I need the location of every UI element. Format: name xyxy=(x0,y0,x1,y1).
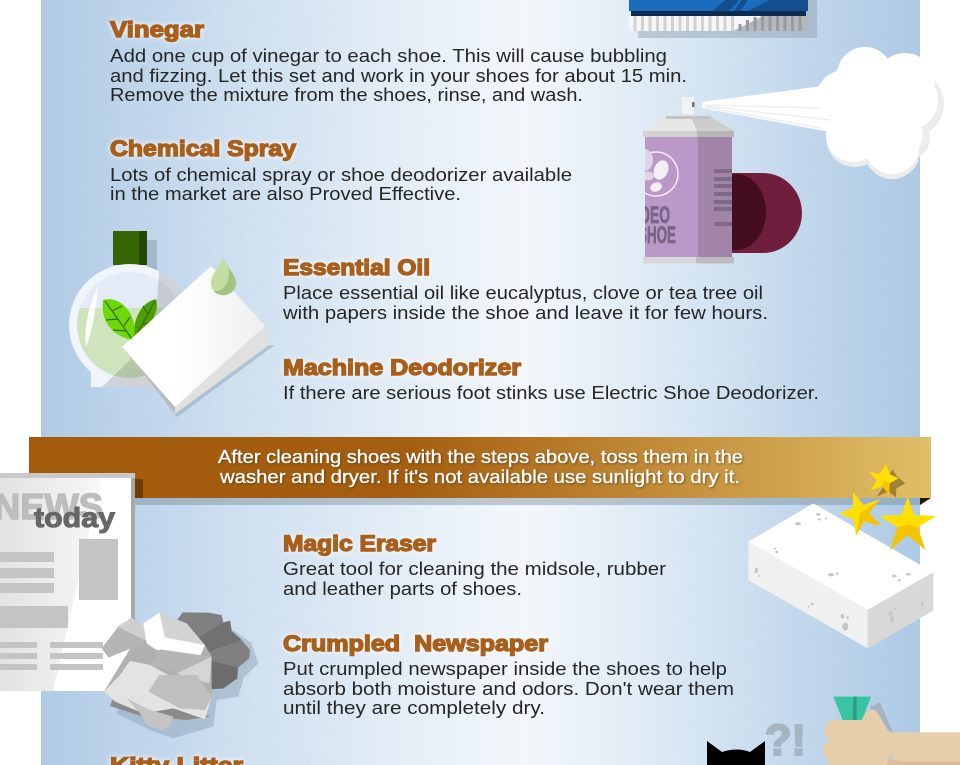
icon: newspaper xyxy=(0,473,143,691)
icon: spray cloud xyxy=(702,47,944,179)
icon: crumpled newspaper xyxy=(102,612,258,738)
text: crumpled newspaper description: Put crumpled newspaper inside the shoes to help xyxy=(283,659,727,679)
icon: deodorizer spray can: SHOE xyxy=(638,222,676,249)
text: crumpled newspaper description: absorb both moisture and odors. Don't wear them xyxy=(283,679,734,699)
text: crumpled newspaper description: until they are completely dry. xyxy=(283,698,545,718)
icon: magic eraser sponge with stars xyxy=(748,464,936,648)
icon: hand holding green cup xyxy=(822,697,960,765)
icon: question and exclamation marks: ?! xyxy=(765,716,806,765)
oil drop xyxy=(211,257,236,296)
text: essential oil description: Place essential oil like eucalyptus, clove or tea tree oil xyxy=(283,283,763,303)
text: essential oil description: with papers inside the shoe and leave it for few hours. xyxy=(282,303,768,323)
icon: essential oil bottle with paper xyxy=(69,231,275,417)
heading: Crumpled Newspaper: Crumpled Newspaper xyxy=(283,631,548,656)
leaves xyxy=(103,299,157,340)
icon: maroon shoe cap xyxy=(732,173,802,253)
icon: newspaper: today xyxy=(34,502,115,533)
heading: Chemical Spray: Chemical Spray xyxy=(110,136,297,161)
text: crumpled newspaper description xyxy=(283,659,734,718)
text: vinegar instructions xyxy=(110,46,687,105)
icon: deodorizer spray can xyxy=(634,97,734,264)
banner: drying tip: washer and dryer. If it's not available use sunlight to dry it. xyxy=(219,467,740,487)
heading: Essential Oil: Essential Oil xyxy=(283,255,430,280)
text: magic eraser description: Great tool for cleaning the midsole, rubber xyxy=(283,559,666,579)
text: chemical spray description: Lots of chemical spray or shoe deodorizer available xyxy=(110,165,572,185)
text: vinegar instructions: Remove the mixture from the shoes, rinse, and wash. xyxy=(110,85,583,105)
text: vinegar instructions: and fizzing. Let this set and work in your shoes for about 15 min. xyxy=(110,66,687,86)
icon: black cat head xyxy=(707,741,765,765)
banner: drying tip: After cleaning shoes with the steps above, toss them in the xyxy=(218,447,743,467)
heading: Machine Deodorizer: Machine Deodorizer xyxy=(283,355,521,380)
text: machine deodorizer description: If there are serious foot stinks use Electric Shoe Deodorizer. xyxy=(283,383,819,403)
text: chemical spray description: in the market are also Proved Effective. xyxy=(110,184,461,204)
banner: drying tip xyxy=(29,437,931,505)
icon: deodorizer spray can: DEO xyxy=(640,202,670,229)
icon: shoe brush xyxy=(629,0,817,38)
text: magic eraser description: and leather parts of shoes. xyxy=(283,579,522,599)
text: essential oil description xyxy=(282,283,768,323)
heading: Magic Eraser: Magic Eraser xyxy=(283,531,436,556)
heading: Vinegar: Vinegar xyxy=(110,17,204,42)
text: vinegar instructions: Add one cup of vinegar to each shoe. This will cause bubbling xyxy=(110,46,667,66)
text: chemical spray description xyxy=(110,165,572,204)
text: magic eraser description xyxy=(283,559,666,599)
